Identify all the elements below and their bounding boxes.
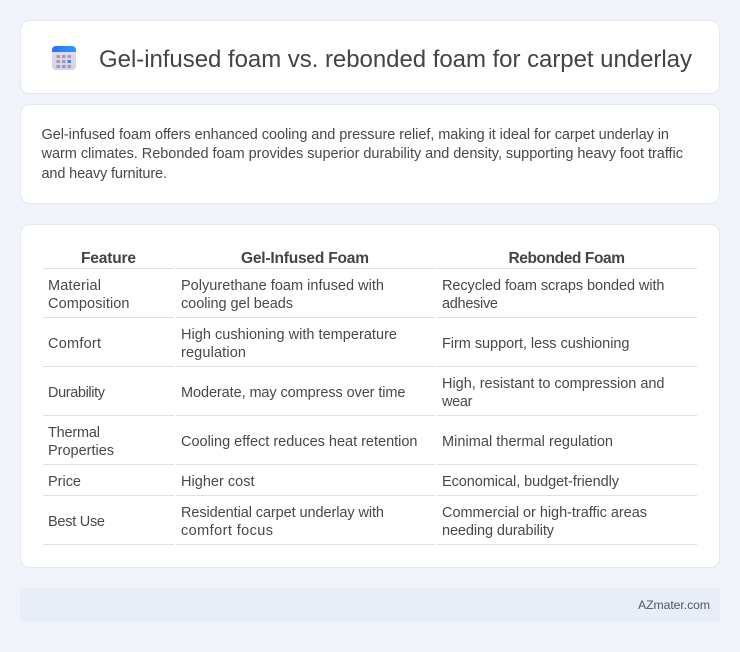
row: comfort: Comfort — [48, 336, 101, 352]
row: thermal properties: Minimal thermal regulation — [442, 434, 613, 450]
footer bar — [20, 588, 720, 622]
row: material composition: adhesive — [442, 296, 498, 312]
row: comfort: High cushioning with temperature — [181, 327, 397, 343]
row: best use: Commercial or high-traffic areas — [442, 505, 647, 521]
row: thermal properties: Cooling effect reduces heat retention — [181, 434, 418, 450]
title: Gel-infused foam vs. rebonded foam for carpet underlay — [99, 46, 692, 73]
panel: introduction — [20, 104, 720, 204]
row: material composition — [48, 278, 664, 312]
footer credit: AZmater.com — [638, 598, 710, 612]
intro text: and heavy furniture. — [42, 166, 167, 182]
row: price — [48, 474, 620, 490]
icon: calendar — [52, 46, 76, 70]
panel: comparison table — [20, 224, 720, 568]
row: best use — [48, 505, 647, 539]
row: durability: Durability — [48, 385, 106, 401]
row: price: Economical, budget-friendly — [442, 474, 620, 490]
row: best use: comfort focus — [181, 523, 273, 539]
row: thermal properties: Properties — [48, 443, 114, 459]
intro text: warm climates. Rebonded foam provides superior durability and density, supporting heavy foot traffic — [40, 146, 683, 162]
row: durability: Moderate, may compress over time — [181, 385, 406, 401]
table header: Gel-Infused Foam — [241, 250, 369, 267]
row: best use: needing durability — [442, 523, 555, 539]
row: thermal properties — [48, 425, 613, 459]
row: best use: Residential carpet underlay with — [181, 505, 384, 521]
row: material composition: Composition — [48, 296, 130, 312]
row: comfort: Firm support, less cushioning — [442, 336, 630, 352]
row: comfort: regulation — [181, 345, 246, 361]
row: material composition: Recycled foam scraps bonded with — [442, 278, 664, 294]
intro text — [40, 127, 683, 182]
table header: Feature — [81, 250, 136, 267]
row: comfort — [48, 327, 630, 361]
row: best use: Best Use — [48, 514, 105, 530]
row: durability: High, resistant to compression and — [442, 376, 664, 392]
row: durability: wear — [441, 394, 473, 410]
header panel — [20, 20, 720, 94]
row: price: Higher cost — [181, 474, 254, 490]
row: material composition: Polyurethane foam infused with — [181, 278, 384, 294]
row: material composition: Material — [48, 278, 101, 294]
row: price: Price — [48, 474, 81, 490]
table header — [81, 250, 625, 267]
row: material composition: cooling gel beads — [181, 296, 293, 312]
row: thermal properties: Thermal — [48, 425, 100, 441]
row: durability — [48, 376, 664, 410]
table header: Rebonded Foam — [508, 250, 625, 267]
intro text: Gel-infused foam offers enhanced cooling and pressure relief, making it ideal for carpet underlay in — [42, 127, 669, 143]
